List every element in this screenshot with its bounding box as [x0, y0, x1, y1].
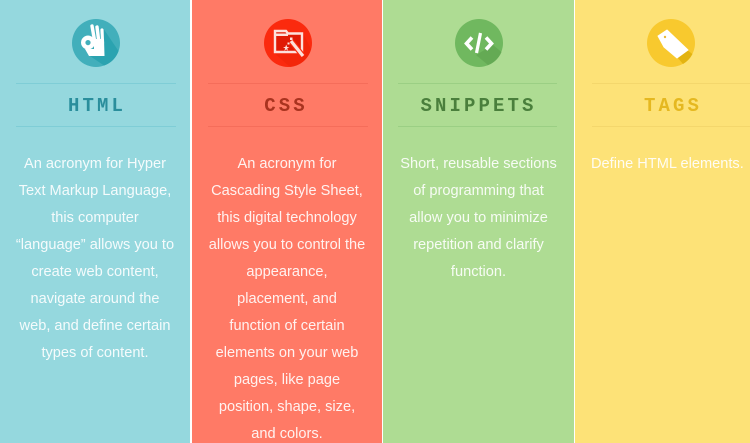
text block: web, and define certain — [20, 318, 170, 334]
text block: An acronym for Hyper — [24, 156, 166, 172]
divider bottom — [16, 126, 176, 127]
text block — [209, 156, 365, 442]
icon: price tag — [647, 19, 695, 67]
heading: TAGS — [644, 95, 702, 117]
text block: function. — [451, 264, 506, 280]
heading: HTML — [68, 95, 126, 117]
divider bottom — [398, 126, 557, 127]
text block: function of certain — [229, 318, 345, 334]
icon: folder with magic wand — [264, 19, 312, 67]
text block: appearance, — [246, 264, 328, 280]
text block: An acronym for — [238, 156, 336, 172]
text block: this computer — [51, 210, 139, 226]
divider top — [398, 83, 557, 84]
text block: “language” allows you to — [16, 237, 174, 253]
text block: Cascading Style Sheet, — [211, 183, 363, 199]
panel: Tags — [575, 0, 750, 443]
text block: of programming that — [413, 183, 544, 199]
heading: SNIPPETS — [420, 95, 536, 117]
text block — [16, 156, 174, 361]
icon: code brackets — [455, 19, 503, 67]
text block: Define HTML elements. — [591, 156, 744, 172]
text block: elements on your web — [216, 345, 358, 361]
panel: CSS — [192, 0, 382, 443]
divider top — [16, 83, 176, 84]
panel: Snippets — [383, 0, 574, 443]
text block: navigate around the — [30, 291, 160, 307]
text block: repetition and clarify — [413, 237, 544, 253]
divider top — [208, 83, 368, 84]
icon: OK hand — [72, 19, 120, 67]
text block: Short, reusable sections — [400, 156, 557, 172]
text block: allows you to control the — [209, 237, 365, 253]
divider bottom — [592, 126, 750, 127]
text block: position, shape, size, — [219, 399, 355, 415]
text block: allow you to minimize — [409, 210, 548, 226]
text block: Text Markup Language, — [19, 183, 171, 199]
text block: placement, and — [237, 291, 337, 307]
text block — [400, 156, 557, 280]
text block: and colors. — [251, 426, 323, 442]
panel: HTML — [0, 0, 190, 443]
text block: types of content. — [41, 345, 149, 361]
heading: CSS — [264, 95, 308, 117]
divider bottom — [208, 126, 368, 127]
text block: pages, like page — [234, 372, 340, 388]
divider top — [592, 83, 750, 84]
text block: this digital technology — [217, 210, 357, 226]
text block: create web content, — [31, 264, 159, 280]
